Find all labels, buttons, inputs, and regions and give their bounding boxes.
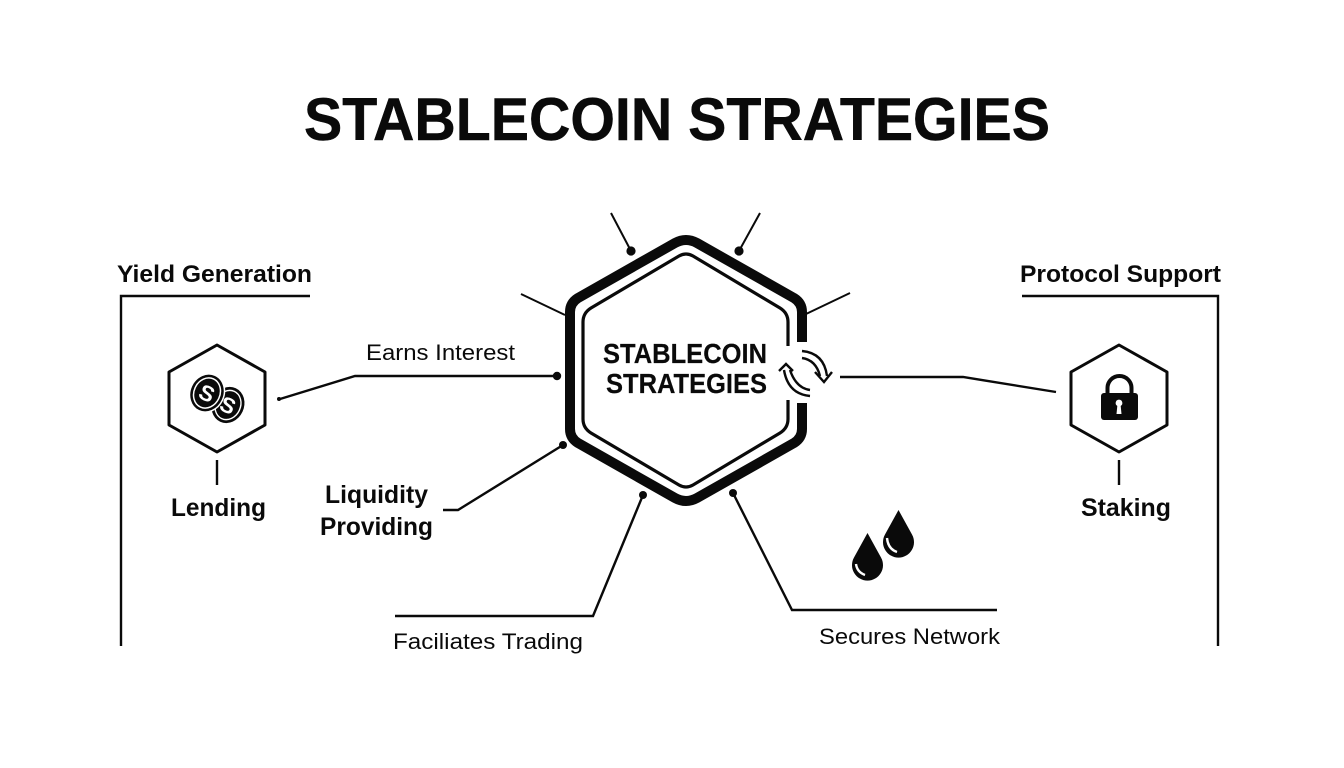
central hexagon [570, 240, 802, 501]
connector: secures network [729, 489, 997, 610]
center label [603, 338, 767, 399]
heading: protocol support: Protocol Support [1020, 261, 1221, 288]
label: liquidity providing: Providing [320, 513, 433, 541]
panel: yield generation bracket [117, 261, 312, 646]
label: staking: Staking [1081, 494, 1171, 522]
label: facilitates trading: Faciliates Trading [393, 629, 583, 654]
connector: staking to hexagon [840, 377, 1056, 392]
label: secures network: Secures Network [819, 624, 1001, 649]
center label: STABLECOIN [603, 338, 767, 369]
stem: staking [1118, 460, 1120, 485]
icon: coins in hexagon [169, 345, 265, 452]
connector: facilitates trading [395, 491, 647, 616]
label: liquidity providing: Liquidity [325, 481, 428, 509]
icon: lock in hexagon [1071, 345, 1167, 452]
center label: STRATEGIES [606, 368, 767, 399]
icon: coins in hexagon: S [195, 379, 219, 408]
icon: coins in hexagon: S [216, 391, 240, 420]
label: lending: Lending [171, 494, 266, 522]
spokes around hexagon [521, 213, 850, 315]
stem: lending [216, 460, 218, 485]
connector: liquidity providing [443, 441, 567, 510]
label: earns interest: Earns Interest [366, 340, 515, 365]
panel: protocol support bracket [1020, 261, 1221, 646]
connector: lending to hexagon [277, 372, 561, 401]
title: STABLECOIN STRATEGIES [304, 86, 1050, 153]
label: liquidity providing [320, 481, 433, 541]
icon: water drops [852, 510, 914, 581]
icon: cycle arrows [779, 351, 832, 396]
heading: yield generation: Yield Generation [117, 261, 312, 288]
